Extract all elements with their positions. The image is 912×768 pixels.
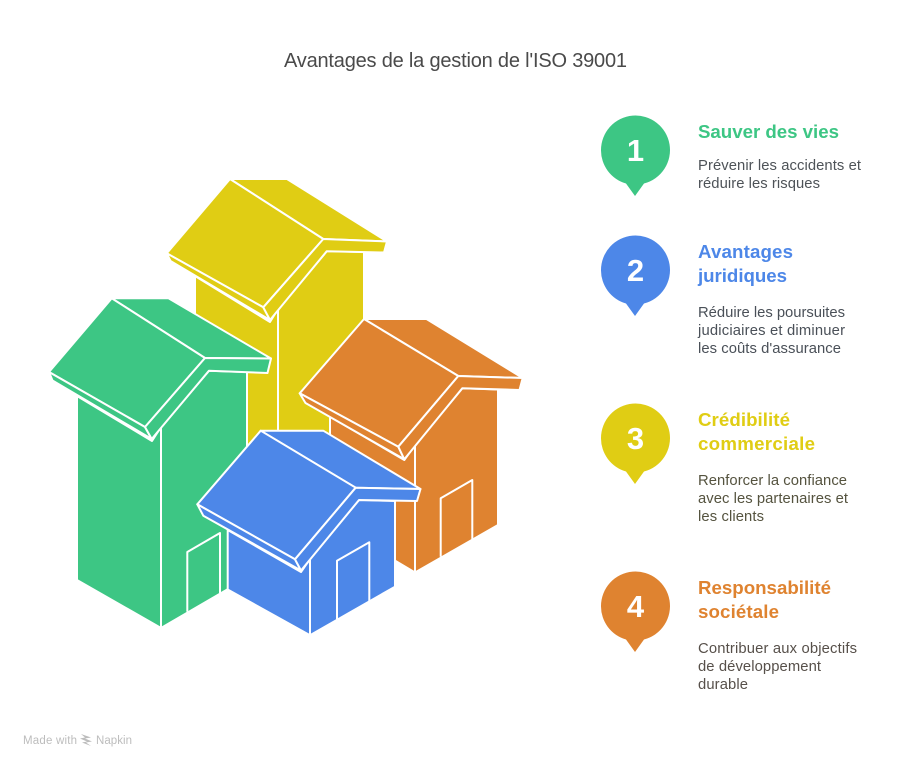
- item 2: avantages juridiques: [601, 236, 845, 357]
- title: Avantages de la gestion de l'ISO 39001: [284, 50, 627, 72]
- description 3: Renforcer la confiance: [698, 473, 847, 489]
- description 3: les clients: [698, 509, 764, 525]
- heading 3: Crédibilité: [698, 409, 790, 430]
- item 1: sauver des vies: [601, 116, 861, 196]
- pin 3: 3: [627, 421, 644, 456]
- pin 4: [601, 572, 670, 652]
- description 4: de développement: [698, 659, 821, 675]
- description 4: durable: [698, 677, 748, 693]
- pin 1: [601, 116, 670, 196]
- heading 2: Avantages: [698, 241, 793, 262]
- description 1: Prévenir les accidents et: [698, 158, 861, 174]
- description 2: judiciaires et diminuer: [697, 323, 845, 339]
- house: yellow: [167, 179, 387, 480]
- house: blue: [197, 431, 420, 635]
- heading 4: Responsabilité: [698, 577, 831, 598]
- heading 4: sociétale: [698, 601, 779, 622]
- heading 3: [698, 409, 815, 454]
- description 3: avec les partenaires et: [698, 491, 848, 507]
- heading 2: [697, 241, 793, 286]
- description 2: Réduire les poursuites: [698, 305, 845, 321]
- heading 2: juridiques: [697, 265, 787, 286]
- illustration: houses: [49, 179, 523, 635]
- description 1: réduire les risques: [698, 176, 820, 192]
- description 3: [698, 473, 848, 525]
- description 1: [698, 158, 861, 192]
- heading 4: [698, 577, 831, 622]
- icon: napkin logo: [80, 734, 92, 746]
- heading 1: Sauver des vies: [698, 121, 839, 142]
- item 3: crédibilité commerciale: [601, 404, 848, 525]
- house: orange: [300, 319, 523, 572]
- footer: made with napkin: Made with: [23, 735, 77, 747]
- pin 2: [601, 236, 670, 316]
- pin 1: 1: [627, 133, 644, 168]
- heading 3: commerciale: [698, 433, 815, 454]
- description 2: [697, 305, 845, 357]
- item 4: responsabilité sociétale: [601, 572, 857, 693]
- pin 2: 2: [627, 253, 644, 288]
- footer: made with napkin: Napkin: [96, 735, 132, 747]
- footer: made with napkin: [23, 734, 132, 747]
- description 4: Contribuer aux objectifs: [698, 641, 857, 657]
- pin 4: 4: [627, 589, 645, 624]
- pin 3: [601, 404, 670, 484]
- house: green: [49, 298, 271, 628]
- description 2: les coûts d'assurance: [698, 341, 841, 357]
- description 4: [698, 641, 857, 693]
